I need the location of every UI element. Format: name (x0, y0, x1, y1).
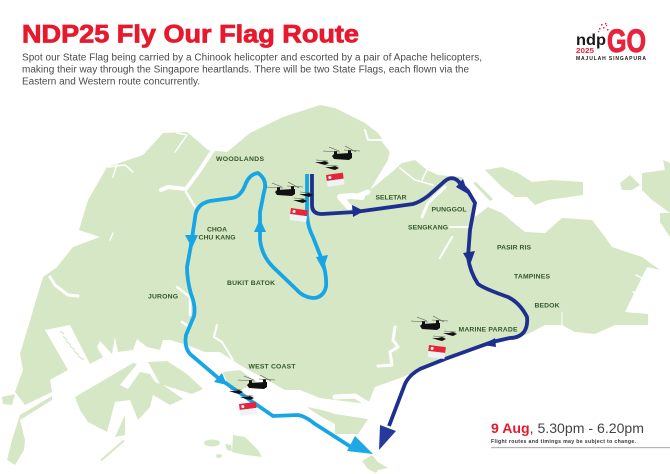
Jurong Island (75, 361, 203, 432)
logo: MAJULAH SINGAPURA (576, 56, 646, 62)
intro text: Spot our State Flag being carried by a Chinook helicopter and escorted by a pair of Apache helicopters, (22, 52, 482, 64)
Pulau Tekong (620, 175, 640, 190)
arrowhead (185, 235, 198, 248)
Tuas pier teeth (60, 331, 84, 360)
main island (15, 105, 660, 405)
Tuas lower (7, 396, 52, 465)
place labels: PUNGGOL (432, 206, 466, 214)
place labels: MARINE PARADE (458, 326, 518, 334)
title: NDP25 Fly Our Flag Route (22, 20, 359, 48)
large arrowhead (347, 436, 373, 454)
divider line (491, 447, 670, 448)
arrowhead (463, 251, 475, 265)
Coney Island (473, 182, 493, 201)
place labels (148, 156, 560, 370)
intro text: making their way through the Singapore heartlands. There will be two State Flags, each flown via the (22, 64, 469, 76)
place labels: BEDOK (534, 302, 560, 310)
logo (576, 23, 646, 62)
place labels: CHOA (207, 226, 227, 234)
place labels: WOODLANDS (216, 156, 264, 163)
large arrowhead (379, 425, 396, 450)
helicopter group: West Coast (229, 375, 275, 416)
place labels: PASIR RIS (497, 244, 531, 252)
place labels: CHU KANG (198, 234, 236, 242)
helicopter group: west of start (266, 182, 313, 222)
place labels: JURONG (148, 294, 178, 300)
Pulau Ubin (485, 167, 583, 205)
arrowhead (483, 338, 496, 347)
logo: 2025 (576, 46, 594, 55)
place labels: TAMPINES (514, 274, 550, 280)
southern islands (204, 440, 220, 446)
place labels: WEST COAST (248, 364, 296, 370)
western route (light blue) (185, 173, 373, 454)
creeks (161, 150, 213, 190)
intro text: Eastern and Western route concurrently. (22, 76, 200, 88)
date and time: 9 Aug, 5.30pm - 6.20pm (491, 420, 644, 436)
intro text (22, 52, 482, 88)
arrowhead (214, 373, 227, 385)
helicopter group: Seletar start (315, 146, 360, 187)
place labels: SENGKANG (408, 224, 448, 232)
disclaimer: Flight routes and timings may be subject to change. (491, 439, 637, 445)
logo: GO (607, 23, 646, 59)
west coast spit (223, 370, 258, 390)
arrowhead (352, 205, 364, 217)
eastern route (dark blue) (312, 174, 527, 450)
Sentosa (307, 407, 368, 434)
place labels: SELETAR (376, 194, 407, 202)
arrowhead (456, 179, 468, 194)
arrowhead (316, 255, 328, 270)
helicopter group: Marine Parade (411, 316, 457, 359)
arrowhead (254, 219, 266, 232)
place labels: BUKIT BATOK (227, 280, 275, 287)
map of Singapore (2, 105, 670, 473)
logo: ndp (576, 32, 606, 49)
